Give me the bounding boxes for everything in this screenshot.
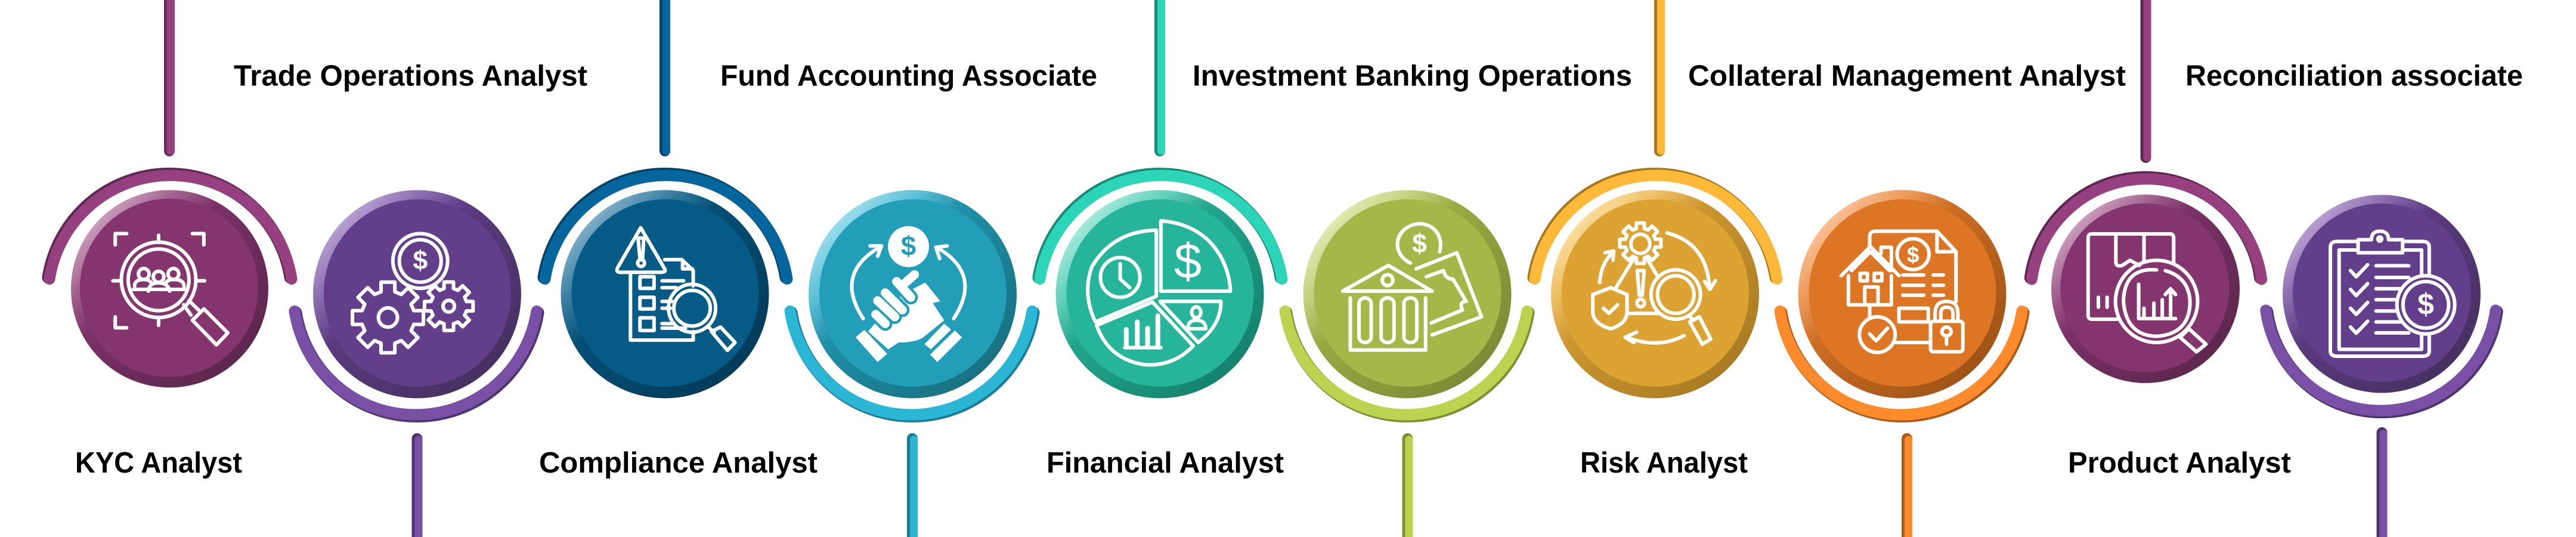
label: Reconciliation associate: [2185, 60, 2523, 92]
connector line: [2145, 0, 2147, 158]
icon: hand holding coin: [852, 226, 965, 362]
connector line: [1907, 439, 1908, 537]
disc: [1055, 190, 1264, 399]
step: Investment Banking Operations: [1193, 60, 1632, 537]
disc: [313, 190, 521, 399]
connector line: [1160, 0, 1162, 151]
label: Fund Accounting Associate: [720, 60, 1097, 92]
icon: house, document and lock: [1841, 231, 1963, 353]
label: Financial Analyst: [1046, 447, 1284, 479]
step: Risk Analyst: [1534, 0, 1777, 479]
arc: [295, 311, 538, 416]
disc: [2283, 195, 2481, 393]
icon: coin and gears: $: [413, 246, 428, 275]
connector line: [417, 439, 419, 537]
icon: box with magnifier and chart: [2088, 234, 2206, 351]
label: Collateral Management Analyst: [1688, 60, 2126, 92]
icon: bank and banknote: $: [1412, 229, 1427, 258]
arc: [544, 174, 787, 279]
step: Collateral Management Analyst: [1688, 60, 2126, 537]
icon: house, document and lock: $: [1907, 243, 1919, 267]
icon: clipboard checklist with coin: [2330, 231, 2455, 356]
icon: hand holding coin: $: [901, 230, 916, 261]
arc: [1285, 311, 1528, 416]
label: Compliance Analyst: [539, 447, 818, 479]
disc: [561, 190, 769, 399]
icon: pie chart: $: [1174, 233, 1202, 289]
disc: [2051, 195, 2240, 383]
icon: warning and document with magnifier: [617, 228, 735, 350]
step: Compliance Analyst: [539, 0, 818, 479]
connector line: [665, 0, 667, 151]
disc: [1304, 190, 1511, 399]
icon: bank and banknote: [1343, 224, 1481, 350]
arc: [1534, 174, 1777, 279]
connector line: [2382, 433, 2383, 537]
label: KYC Analyst: [75, 447, 242, 479]
step: Product Analyst: [2030, 0, 2291, 479]
step: KYC Analyst: [48, 0, 292, 479]
disc: [1798, 190, 2006, 399]
step: Financial Analyst: [1039, 0, 1284, 479]
icon: risk cycle with gear, shield and magnifier: [1593, 223, 1716, 344]
step: Trade Operations Analyst: [234, 60, 587, 537]
connector line: [169, 0, 171, 151]
disc: [1551, 190, 1759, 399]
connector line: [912, 439, 914, 537]
step: Fund Accounting Associate: [720, 60, 1097, 537]
step: Reconciliation associate: [2185, 60, 2523, 537]
connector line: [1407, 439, 1409, 537]
icon: clipboard checklist with coin: $: [2417, 288, 2434, 321]
icon: magnifier over people: [113, 233, 228, 345]
icon: pie chart: [1088, 221, 1231, 365]
icon: coin and gears: [352, 233, 473, 353]
label: Product Analyst: [2068, 447, 2291, 479]
arc: [2030, 177, 2262, 279]
connector line: [1659, 0, 1661, 151]
arc: [48, 174, 292, 279]
label: Investment Banking Operations: [1193, 60, 1632, 92]
arc: [1780, 311, 2023, 416]
arc: [2266, 310, 2497, 412]
label: Risk Analyst: [1580, 447, 1748, 479]
disc: [809, 190, 1017, 399]
label: Trade Operations Analyst: [234, 60, 587, 92]
arc: [790, 311, 1033, 416]
disc: [71, 190, 268, 388]
arc: [1039, 174, 1282, 279]
